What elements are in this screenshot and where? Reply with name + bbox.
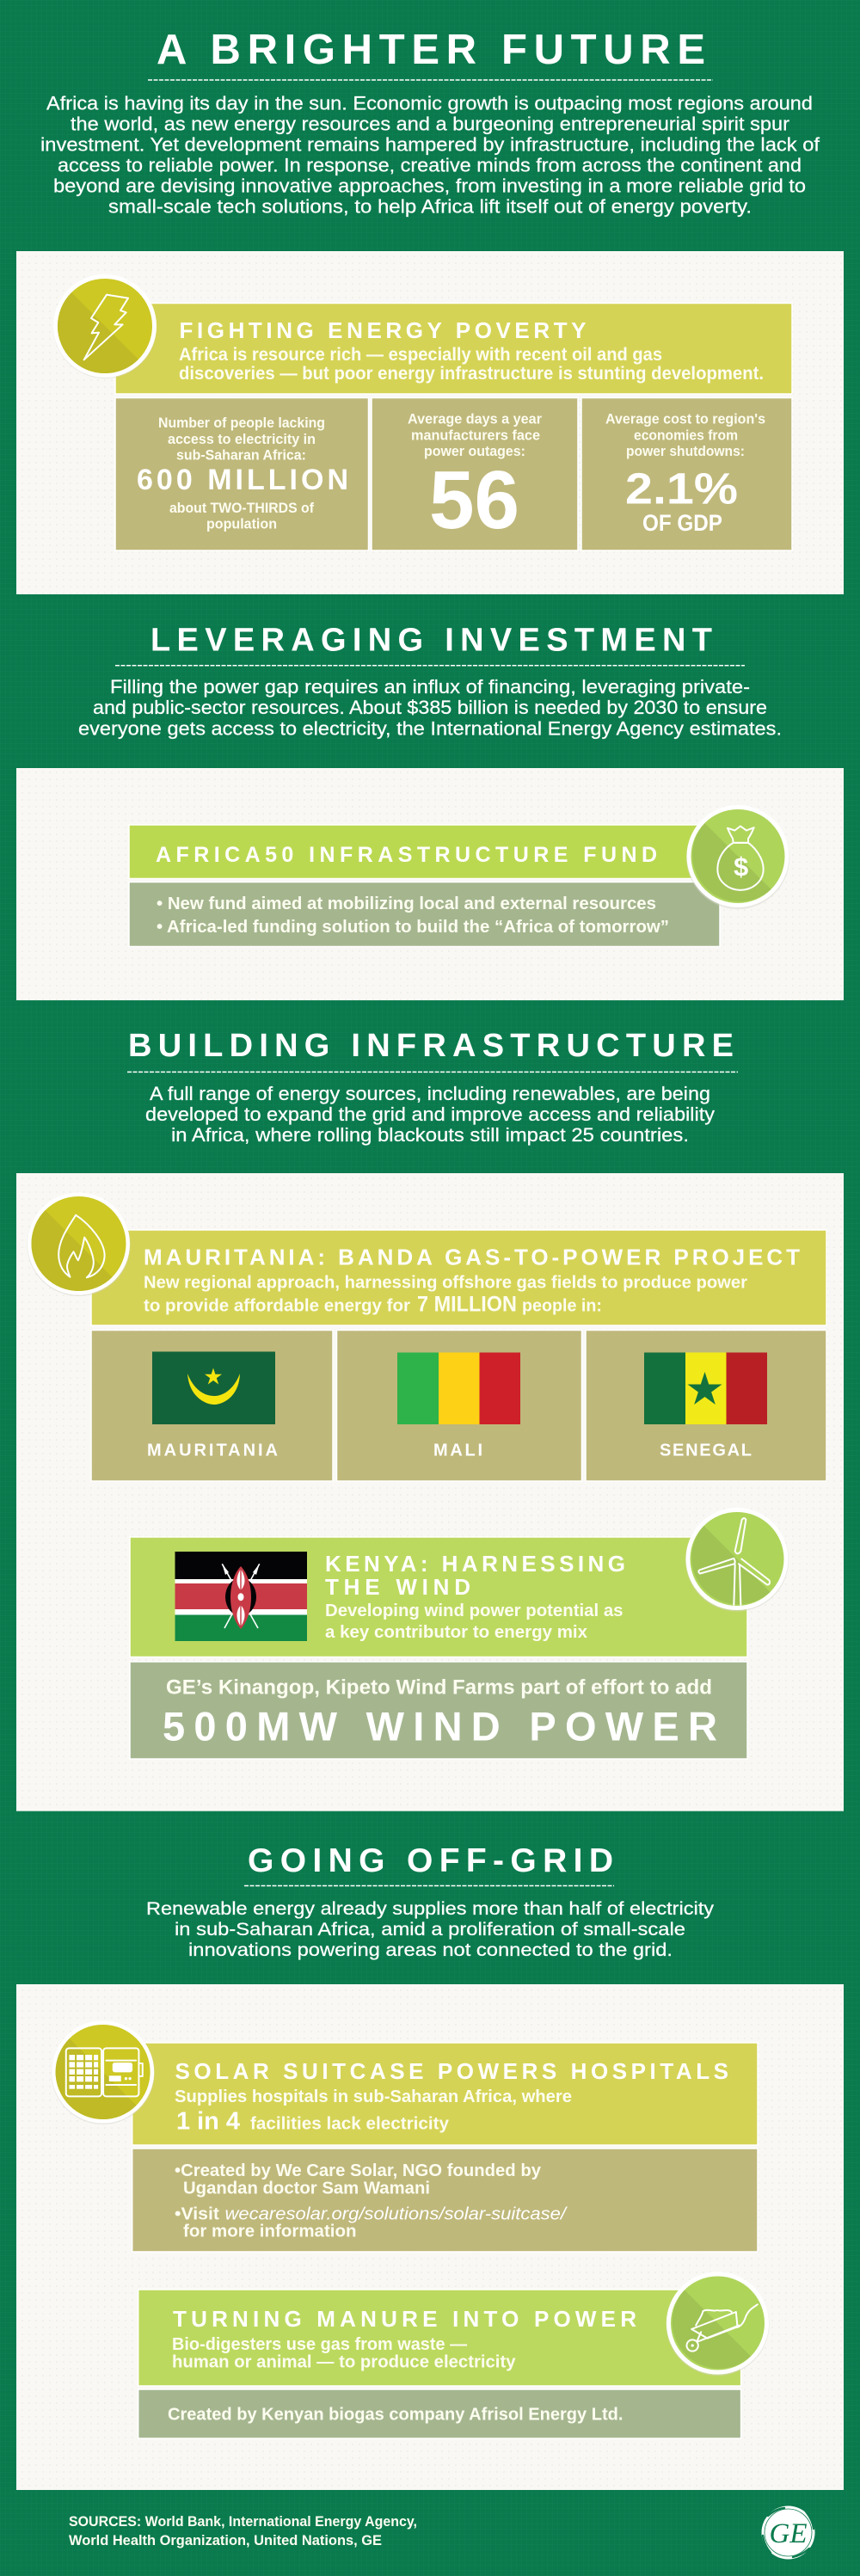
header box: Mauritania project: people in:	[522, 1297, 602, 1316]
intro text: the world, as new energy resources and a burgeoning entrepreneurial spirit spur	[71, 114, 789, 134]
text: building infrastructure: developed to expand the grid and improve access and reliability	[145, 1104, 715, 1125]
text: building infrastructure: A full range of energy sources, including renewables, are being	[150, 1083, 710, 1104]
text: going off-grid: in sub-Saharan Africa, amid a proliferation of small-scale	[175, 1920, 685, 1940]
intro text: access to reliable power. In response, creative minds from across the continent and	[58, 155, 802, 175]
intro text: Africa is having its day in the sun. Economic growth is outpacing most regions around	[46, 93, 813, 114]
icon: money bag: $	[734, 852, 748, 882]
stat: 2.1 percent of GDP	[581, 397, 792, 550]
header box: manure: Bio-digesters use gas from waste —	[172, 2335, 467, 2354]
icon: money bag	[686, 805, 789, 909]
logo: GE	[762, 2506, 815, 2560]
stat: 600 million: population	[206, 516, 277, 532]
box: solar suitcase details: •Visit	[175, 2205, 219, 2224]
box: solar suitcase details	[132, 2149, 758, 2252]
box: Mauritania flag: MAURITANIA	[147, 1442, 278, 1460]
header box: fighting energy poverty: discoveries — but poor energy infrastructure is stunting development.	[179, 364, 764, 384]
header box: Mauritania project: MAURITANIA: BANDA GAS-TO-POWER PROJECT	[144, 1244, 800, 1270]
header box: Kenya wind	[130, 1537, 747, 1657]
intro text	[40, 93, 820, 217]
header box: manure: TURNING MANURE INTO POWER	[173, 2306, 636, 2332]
stat: 2.1 percent of GDP: power shutdowns:	[626, 443, 745, 459]
panel: off-grid innovations	[16, 1984, 844, 2490]
box: solar suitcase details: Ugandan doctor Sam Wamani	[183, 2179, 430, 2198]
sources: World Health Organization, United Nations, GE	[69, 2533, 382, 2548]
flag: Mali	[397, 1352, 520, 1424]
stat: 56 days: manufacturers face	[411, 427, 540, 444]
header box: Mauritania project	[91, 1230, 826, 1325]
header box: fighting energy poverty: Africa is resource rich — especially with recent oil and gas	[179, 345, 662, 365]
icon: lightning bolt	[53, 274, 157, 378]
header box: solar suitcase: SOLAR SUITCASE POWERS HOSPITALS	[175, 2058, 728, 2084]
box: 500MW wind power	[130, 1662, 747, 1759]
heading: leveraging investment: LEVERAGING INVESTMENT	[150, 623, 712, 659]
header box: Mauritania project: to provide affordable energy for	[144, 1297, 410, 1316]
header box: Kenya wind: Developing wind power potential as	[325, 1602, 623, 1620]
intro text: beyond are devising innovative approaches, from investing in a more reliable grid to	[53, 175, 806, 196]
stat: 600 million: Number of people lacking	[158, 415, 325, 431]
stat: 56 days: 56	[429, 454, 519, 546]
stat: 600 million: 600 MILLION	[137, 464, 348, 496]
panel: Africa50 fund	[16, 768, 844, 1000]
box: Afrisol Energy: Created by Kenyan biogas company Afrisol Energy Ltd.	[168, 2405, 623, 2424]
box: Mali flag: MALI	[433, 1442, 482, 1460]
box: 500MW wind power: 500MW WIND POWER	[163, 1703, 717, 1749]
icon: wind turbine	[685, 1508, 789, 1612]
header box: Mauritania project: 7 MILLION	[417, 1292, 517, 1316]
header box: Kenya wind: a key contributor to energy mix	[325, 1623, 587, 1642]
text: building infrastructure	[145, 1083, 715, 1146]
heading: building infrastructure: BUILDING INFRASTRUCTURE	[128, 1028, 734, 1064]
box: solar suitcase details: wecaresolar.org/solutions/solar-suitcase/	[225, 2205, 568, 2224]
sources: SOURCES: World Bank, International Energy Agency,	[69, 2514, 417, 2530]
panel: fighting energy poverty	[16, 251, 844, 594]
sources	[69, 2514, 417, 2548]
header box: fighting energy poverty	[115, 303, 792, 394]
heading: going off-grid: GOING OFF-GRID	[248, 1842, 613, 1879]
bullet list: Africa50	[129, 882, 720, 946]
header box: solar suitcase: 1 in 4	[176, 2107, 240, 2135]
box: solar suitcase details: for more information	[183, 2222, 356, 2241]
icon: solar suitcase	[52, 2020, 155, 2124]
box: Senegal flag	[586, 1330, 826, 1481]
stat: 2.1 percent of GDP: 2.1%	[625, 464, 738, 513]
bullet list: Africa50: • New fund aimed at mobilizing local and external resources	[157, 895, 656, 913]
stat: 56 days: Average days a year	[408, 411, 542, 427]
stat: 56 days: power outages:	[424, 443, 525, 459]
stat: 2.1 percent of GDP: OF GDP	[642, 510, 722, 536]
flag: Mauritania	[152, 1352, 275, 1424]
header box: Africa50	[129, 825, 722, 879]
stat: 600 million: about TWO-THIRDS of	[169, 500, 314, 516]
text: going off-grid: innovations powering areas not connected to the grid.	[188, 1940, 673, 1960]
stat: 56 days	[372, 397, 578, 550]
stat: 2.1 percent of GDP: economies from	[634, 427, 738, 444]
text: leveraging investment: and public-sector resources. About $385 billion is needed by 2030 to ensure	[93, 697, 767, 718]
header box: fighting energy poverty: FIGHTING ENERGY POVERTY	[179, 317, 587, 343]
text: leveraging investment: Filling the power gap requires an influx of financing, leveraging private-	[110, 676, 750, 698]
box: solar suitcase details: •Created by We Care Solar, NGO founded by	[175, 2161, 542, 2180]
box: Afrisol Energy	[138, 2389, 741, 2438]
box: Mauritania flag	[91, 1330, 333, 1481]
icon: wheelbarrow	[666, 2272, 769, 2376]
header box: solar suitcase: facilities lack electricity	[250, 2114, 450, 2133]
intro text: investment. Yet development remains hampered by infrastructure, including the lack of	[40, 134, 820, 155]
intro text: small-scale tech solutions, to help Africa lift itself out of energy poverty.	[108, 196, 752, 217]
stat: 600 million	[115, 397, 368, 550]
title: A BRIGHTER FUTURE	[157, 27, 705, 73]
header box: manure	[138, 2290, 741, 2386]
text: going off-grid: Renewable energy already supplies more than half of electricity	[146, 1899, 715, 1919]
box: Senegal flag: SENEGAL	[660, 1442, 752, 1460]
icon: flame	[28, 1192, 131, 1296]
box: Mali flag	[337, 1330, 581, 1481]
stat: 2.1 percent of GDP: Average cost to region's	[605, 411, 765, 427]
text: going off-grid	[146, 1899, 715, 1960]
text: leveraging investment: everyone gets access to electricity, the International Energy Agency estimates.	[78, 717, 782, 740]
stat: 600 million: sub-Saharan Africa:	[176, 447, 306, 463]
panel: infrastructure projects	[16, 1173, 844, 1811]
header box: Kenya wind: KENYA: HARNESSING	[325, 1551, 625, 1577]
text: leveraging investment	[78, 676, 782, 740]
bullet list: Africa50: • Africa-led funding solution to build the “Africa of tomorrow”	[157, 918, 669, 937]
header box: manure: human or animal — to produce electricity	[172, 2353, 516, 2372]
header box: Mauritania project: New regional approach, harnessing offshore gas fields to produce power	[144, 1273, 747, 1292]
text: building infrastructure: in Africa, where rolling blackouts still impact 25 countries.	[171, 1124, 689, 1146]
stat: 600 million: access to electricity in	[168, 431, 316, 447]
header box: solar suitcase	[132, 2043, 758, 2145]
logo: GE: GE	[769, 2518, 807, 2549]
box: 500MW wind power: GE’s Kinangop, Kipeto Wind Farms part of effort to add	[166, 1675, 712, 1700]
flag: Kenya	[175, 1552, 307, 1641]
flag: Senegal	[644, 1352, 767, 1424]
header box: Africa50: AFRICA50 INFRASTRUCTURE FUND	[156, 843, 657, 867]
header box: Kenya wind: THE WIND	[325, 1574, 470, 1600]
header box: solar suitcase: Supplies hospitals in sub-Saharan Africa, where	[175, 2087, 572, 2106]
